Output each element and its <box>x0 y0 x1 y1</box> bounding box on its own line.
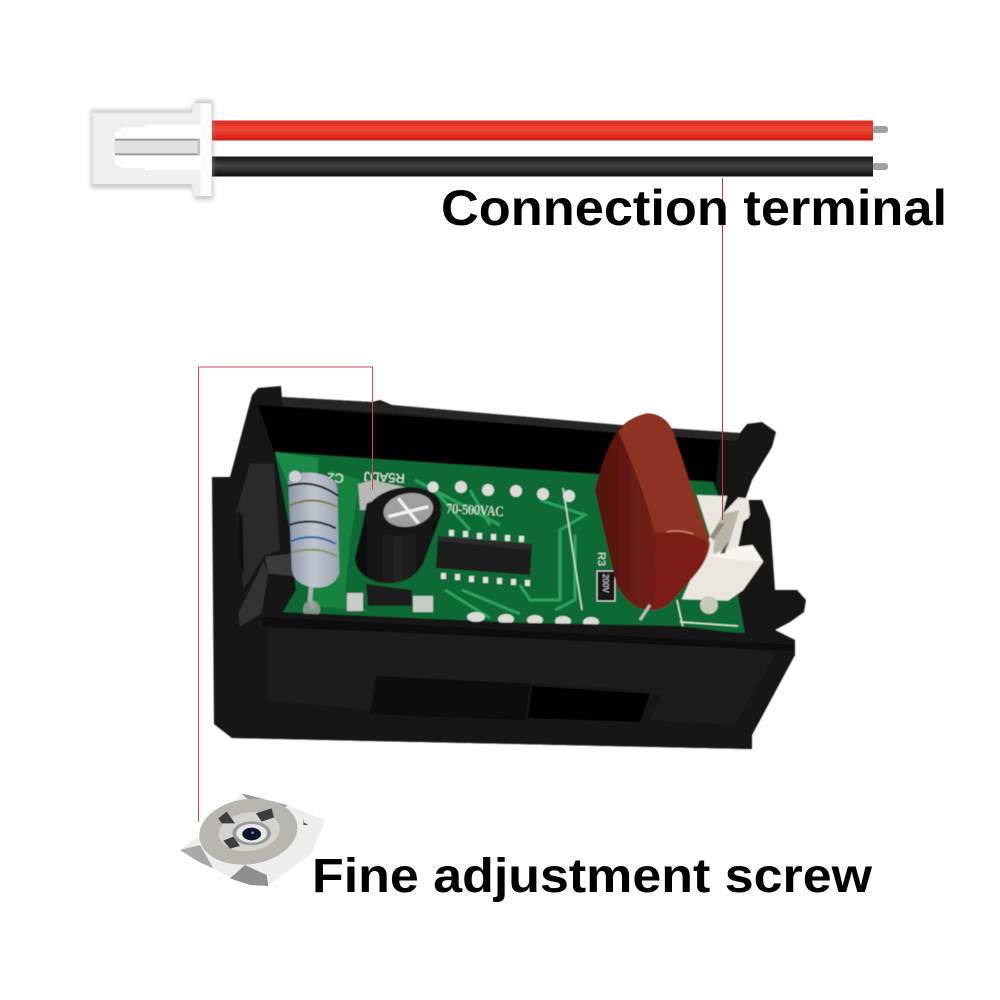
pcb silkscreen: 70-500VAC <box>446 500 504 519</box>
wire-wound resistor <box>288 471 339 618</box>
left wall inner faces <box>237 463 295 670</box>
pcb silkscreen: R5ADJ <box>363 469 405 486</box>
wall top highlight <box>281 397 740 441</box>
callout line: connection terminal <box>722 178 724 520</box>
electrolytic capacitor <box>355 481 445 583</box>
pcb solder pads <box>428 481 599 627</box>
R3 SMD resistor <box>595 552 615 601</box>
front case lip <box>214 612 795 749</box>
pcb silkscreen: C2 <box>327 470 344 486</box>
black wire <box>212 156 888 176</box>
wire harness <box>91 100 888 200</box>
label: connection terminal: Connection terminal <box>441 180 947 236</box>
white connector socket <box>682 495 763 601</box>
SOT transistor <box>347 584 433 612</box>
R3 SMD resistor: R3 <box>595 552 607 566</box>
red film capacitor <box>595 413 710 610</box>
device: panel meter <box>212 386 806 749</box>
inner wall shadow <box>258 405 720 490</box>
callout line: fine adjustment screw <box>198 367 372 822</box>
white JST plug <box>91 100 213 200</box>
icon: trimmer potentiometer <box>180 792 325 887</box>
pcb mounting hole <box>700 596 718 614</box>
lead wire <box>640 605 650 620</box>
red wire <box>212 120 888 140</box>
IC chip <box>436 530 532 586</box>
label: fine adjustment screw: Fine adjustment screw <box>312 850 873 903</box>
pcb silkscreen <box>327 469 504 519</box>
case back wall and left walls <box>212 386 806 749</box>
trimmer on board <box>358 480 415 510</box>
green circuit board <box>275 452 745 633</box>
R3 SMD resistor: 200V <box>601 574 610 593</box>
